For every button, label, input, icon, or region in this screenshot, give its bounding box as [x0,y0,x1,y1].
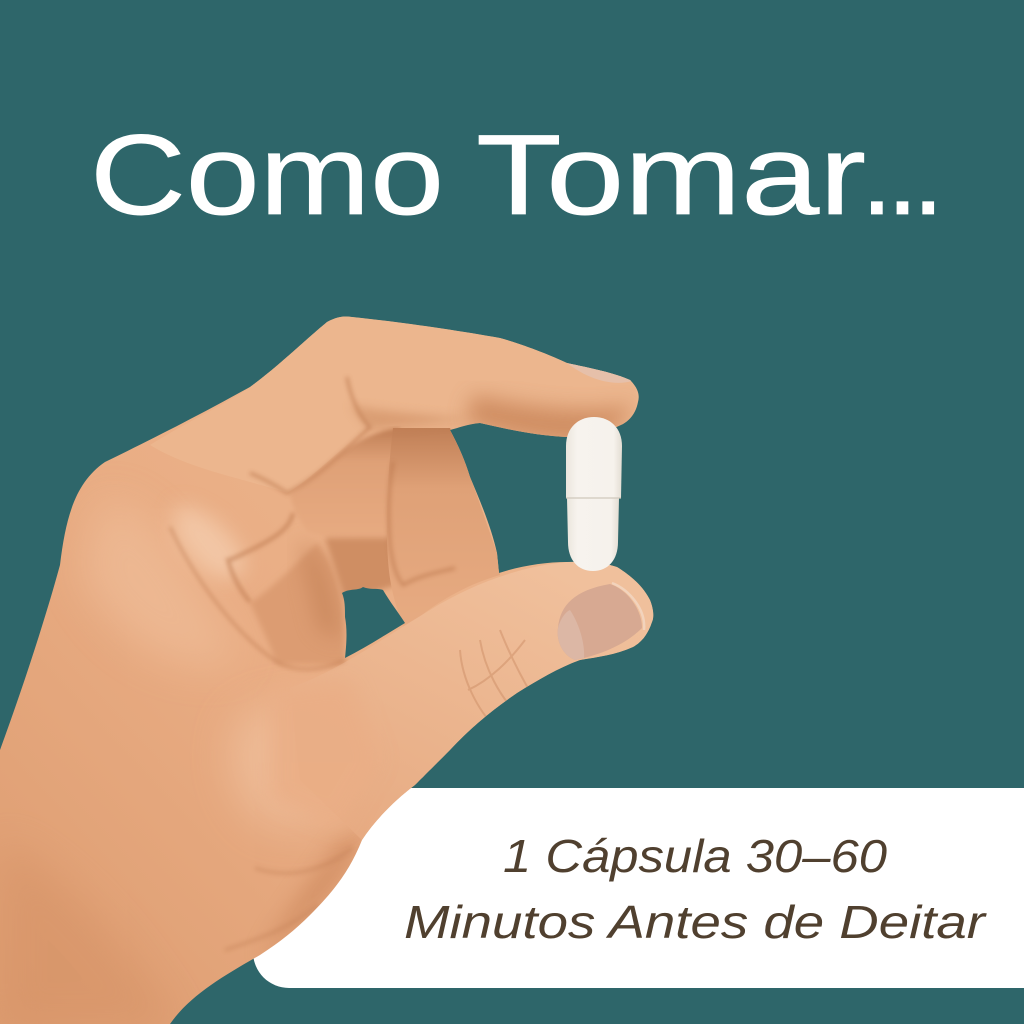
back knuckle segment [290,428,400,541]
title: Como [90,112,444,239]
panel: dosage instructions [253,788,1024,988]
thumb [332,562,654,840]
index finger underside shadow [468,395,632,442]
gap between fingers [342,587,405,658]
thumb knuckle creases [459,630,528,717]
thenar fold [250,543,345,665]
title [90,112,938,239]
palm fold crease [170,527,345,669]
panel background [253,788,1024,988]
ring finger segment [325,538,397,600]
capsule seam [566,497,621,499]
thumbnail rim [612,583,644,630]
wrist creases [227,866,320,950]
dosage text: 1 Cápsula 30–60 [503,830,887,882]
index knuckle shadow [354,405,454,431]
thumbnail lunula [558,610,584,660]
thumb base blend [271,708,328,810]
title: Tomar [476,112,866,239]
capsule upper half [566,417,622,498]
icon: capsule [566,417,622,571]
thumbnail [558,584,642,660]
index fingernail [566,362,632,383]
title: ... [861,112,938,239]
lower palm shading [30,516,362,1000]
index knuckle crease [250,377,370,493]
index finger [150,317,637,493]
inner palm knuckle highlight [175,505,245,579]
icon: hand holding capsule [0,300,670,1024]
hand base [0,300,670,1024]
knuckle crease [228,513,293,602]
capsule lower half [567,498,619,571]
thenar shadow [298,546,340,632]
middle finger crease [389,462,455,585]
middle finger segment [387,428,500,606]
dosage text: Minutos Antes de Deitar [404,896,987,948]
dosage text [404,830,987,948]
